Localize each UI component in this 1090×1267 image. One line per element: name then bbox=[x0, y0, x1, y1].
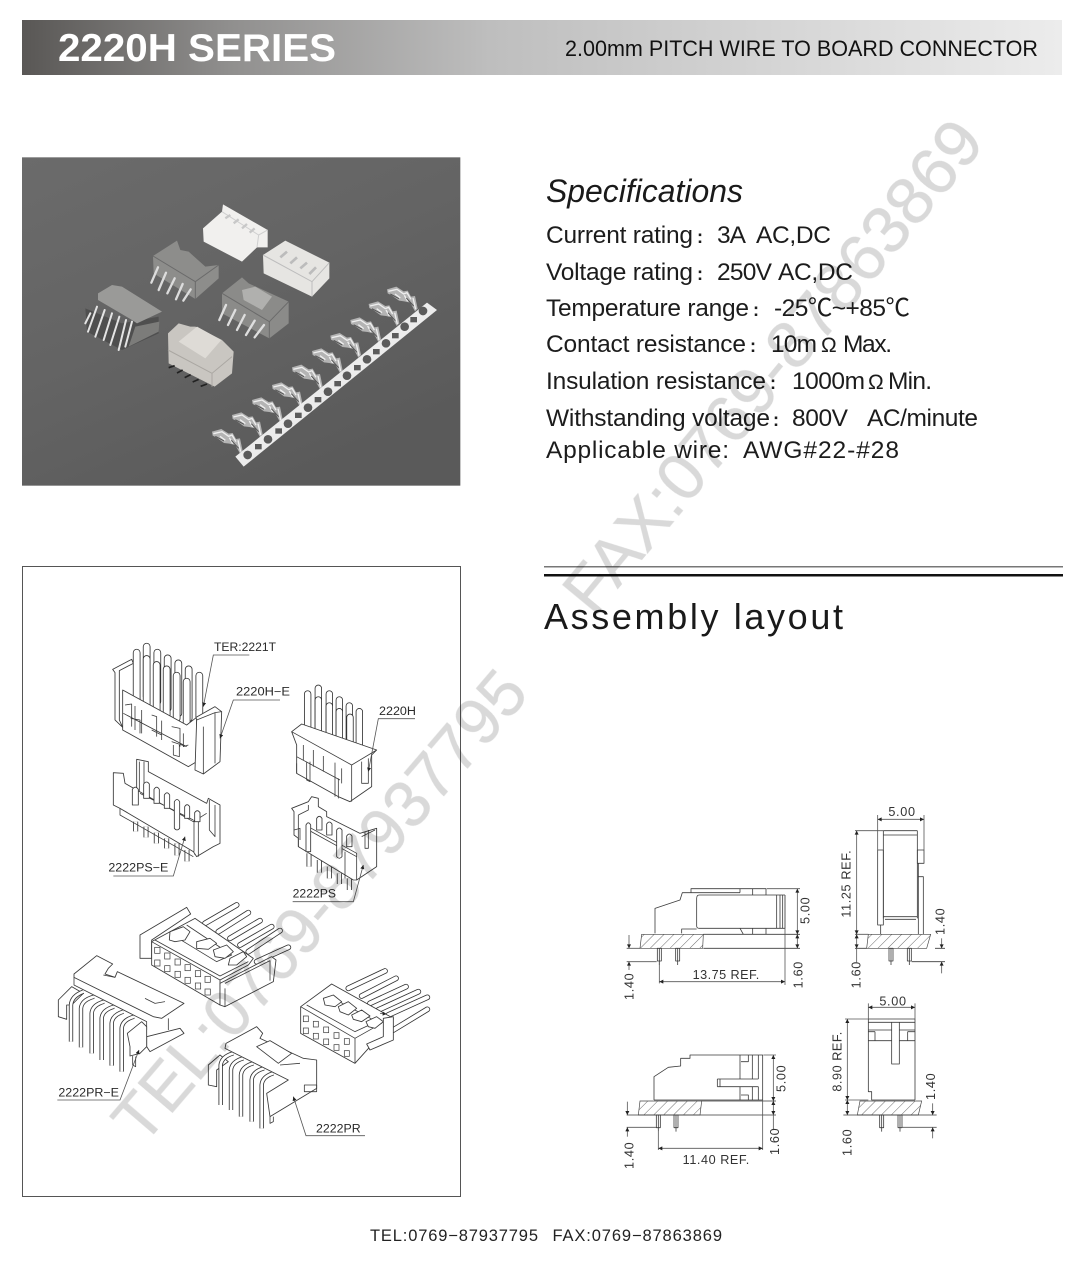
specifications list: 3A bbox=[717, 222, 747, 249]
connector 2220H bbox=[292, 688, 377, 802]
white housing 1 bbox=[203, 204, 268, 262]
specifications list: AC,DC bbox=[778, 259, 853, 286]
front view dimension drawing: 11.25 REF: 5.00 bbox=[888, 805, 915, 819]
watermark: FAX:0769-87863869 bbox=[548, 105, 997, 627]
specifications list: 250V bbox=[717, 259, 773, 286]
footer contact line: TEL:0769−87937795 bbox=[370, 1227, 538, 1245]
specifications list: Ω bbox=[821, 334, 837, 357]
footer contact line bbox=[370, 1227, 722, 1245]
front view dimension drawing: 11.25 REF bbox=[839, 805, 947, 988]
specifications list: : bbox=[773, 410, 779, 430]
specifications list: 800V bbox=[792, 405, 849, 432]
specifications list: AWG#22-#28 bbox=[743, 437, 899, 464]
specifications list: : bbox=[697, 264, 703, 284]
specifications list: Temperature range bbox=[546, 295, 749, 322]
specifications list: Voltage rating bbox=[546, 259, 693, 286]
product photo bbox=[22, 157, 460, 486]
grey header centre bbox=[219, 277, 289, 338]
specifications list: : bbox=[750, 336, 756, 356]
series title: 2220H SERIES bbox=[58, 27, 336, 70]
white housing 2 bbox=[263, 241, 329, 297]
assembly layout heading: Assembly layout bbox=[544, 596, 843, 637]
specifications list: Ω bbox=[868, 371, 884, 394]
specifications list: Current rating bbox=[546, 222, 693, 249]
connector 2222PS bbox=[292, 797, 377, 890]
footer contact line: FAX:0769−87863869 bbox=[552, 1227, 722, 1245]
label: 2222PS-E: 2222PS−E bbox=[108, 862, 169, 875]
specifications list: : bbox=[770, 373, 776, 393]
side view dimension drawing: 11.40 REF bbox=[623, 1055, 789, 1169]
label: TER:2221T: TER:2221T bbox=[214, 641, 276, 654]
label: TER:2221T bbox=[203, 641, 276, 707]
grey header straight bbox=[151, 241, 219, 301]
connector 2222PS-E bbox=[113, 759, 220, 861]
front view dimension drawing: 11.25 REF: 1.60 bbox=[850, 962, 864, 988]
side view dimension drawing: 13.75 REF: 1.40 bbox=[623, 973, 637, 1000]
front view dimension drawing: 11.25 REF: 11.25 REF. bbox=[839, 850, 853, 918]
watermark bbox=[97, 105, 997, 1156]
side view dimension drawing: 13.75 REF bbox=[623, 889, 812, 1000]
specifications list: : bbox=[753, 300, 759, 320]
label: 2222PS-E bbox=[108, 837, 185, 876]
label: 2220H-E: 2220H−E bbox=[236, 686, 290, 699]
header bar bbox=[22, 20, 1062, 75]
side view dimension drawing: 11.40 REF: 1.40 bbox=[623, 1142, 637, 1169]
front view dimension drawing: 8.90 REF: 5.00 bbox=[879, 995, 906, 1009]
front view dimension drawing: 8.90 REF: 8.90 REF. bbox=[831, 1032, 845, 1092]
label: 2222PR: 2222PR bbox=[316, 1123, 361, 1136]
front view dimension drawing: 8.90 REF: 1.60 bbox=[841, 1129, 855, 1156]
light grey header bbox=[168, 323, 234, 387]
subtitle: 2.00mm PITCH WIRE TO BOARD CONNECTOR bbox=[565, 36, 1038, 61]
receptacle small bbox=[301, 971, 427, 1063]
front view dimension drawing: 11.25 REF: 1.40 bbox=[933, 908, 947, 935]
connector 2220H-E with terminals bbox=[113, 647, 222, 774]
specifications list: : bbox=[697, 227, 703, 247]
side view dimension drawing: 13.75 REF: 1.60 bbox=[791, 962, 805, 988]
watermark: TEL:0769-87937795 bbox=[97, 655, 541, 1156]
side view dimension drawing: 11.40 REF: 5.00 bbox=[775, 1065, 789, 1092]
connector 2222PR bbox=[208, 1027, 317, 1128]
side view dimension drawing: 11.40 REF: 11.40 REF. bbox=[683, 1153, 749, 1167]
label: 2220H-E bbox=[220, 686, 290, 738]
specifications list: -25℃~+85℃ bbox=[774, 295, 910, 322]
label: 2222PR bbox=[293, 1097, 365, 1136]
specifications list bbox=[546, 222, 978, 464]
front view dimension drawing: 8.90 REF: 1.40 bbox=[924, 1073, 938, 1100]
specifications list: Contact resistance bbox=[546, 331, 746, 358]
panel: connector isometric drawings bbox=[22, 566, 460, 1196]
specifications heading: Specifications bbox=[546, 173, 743, 209]
label: 2220H: 2220H bbox=[379, 705, 416, 718]
front view dimension drawing: 8.90 REF bbox=[831, 995, 938, 1156]
specifications list: Insulation resistance bbox=[546, 368, 766, 395]
specifications list: Min. bbox=[888, 368, 932, 395]
specifications list: Withstanding voltage bbox=[546, 405, 770, 432]
label: 2222PS bbox=[293, 865, 363, 902]
specifications list: 10m bbox=[771, 331, 817, 358]
specifications list: 1000m bbox=[792, 368, 865, 395]
connector 2222PR-E bbox=[58, 956, 184, 1072]
specifications list: Max. bbox=[843, 331, 892, 358]
specifications list: Applicable wire: bbox=[546, 437, 729, 464]
section divider bbox=[544, 566, 1063, 576]
label: 2222PR-E: 2222PR−E bbox=[58, 1087, 119, 1100]
specifications list: AC/minute bbox=[867, 405, 978, 432]
side view dimension drawing: 13.75 REF: 13.75 REF. bbox=[693, 968, 759, 982]
receptacle large bbox=[140, 905, 288, 1007]
label: 2220H bbox=[368, 705, 416, 772]
terminal strip bbox=[212, 287, 437, 467]
grey right-angle header bbox=[85, 285, 162, 350]
specifications list: AC,DC bbox=[756, 222, 831, 249]
side view dimension drawing: 11.40 REF: 1.60 bbox=[768, 1128, 782, 1155]
label: 2222PS: 2222PS bbox=[293, 887, 336, 900]
side view dimension drawing: 13.75 REF: 5.00 bbox=[798, 897, 812, 924]
label: 2222PR-E bbox=[57, 1050, 139, 1100]
